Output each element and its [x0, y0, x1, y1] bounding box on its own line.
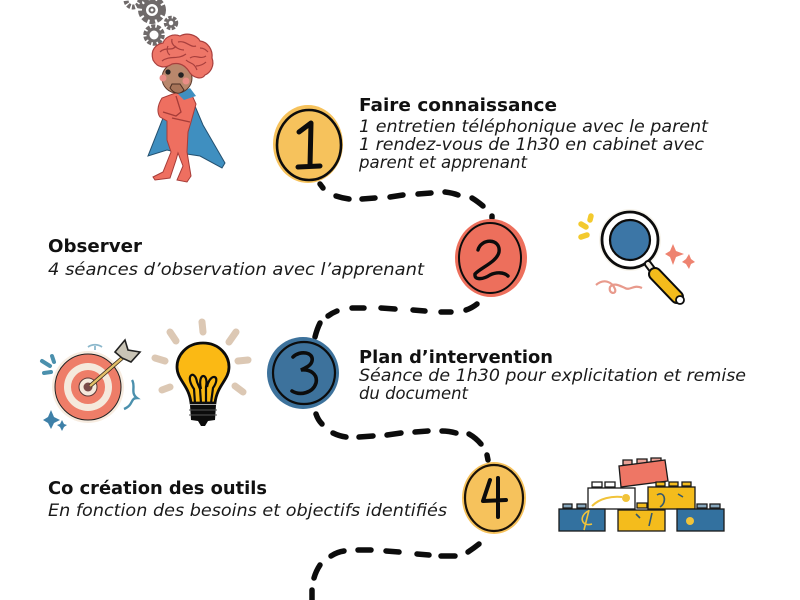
step 4 heading: Co création des outils: [48, 479, 267, 499]
icon: magnifying glass: [581, 209, 695, 304]
icon: light bulb: [155, 322, 248, 426]
filament: [190, 375, 216, 403]
body: [153, 92, 196, 182]
red brick: [623, 458, 661, 465]
step 3 badge: [267, 337, 339, 409]
step 1 description: [358, 117, 709, 172]
arrow: [90, 353, 128, 386]
base: [190, 405, 216, 426]
number 4: [483, 478, 506, 517]
icon: target with arrow: [42, 340, 140, 431]
blue right brick: [697, 504, 720, 508]
blue left brick: [563, 504, 586, 508]
step 2 description: 4 séances d’observation avec l’apprenant: [48, 260, 425, 279]
step 2 badge: [455, 219, 527, 297]
rays: [155, 322, 248, 392]
yellow lower brick: [637, 503, 647, 508]
white brick: [592, 482, 615, 487]
path: dashed route: [312, 184, 492, 600]
yellow upper brick: [656, 482, 691, 486]
step 4 badge: [462, 462, 526, 534]
number 2: [475, 241, 508, 279]
squiggle: [596, 281, 642, 293]
sparkles: [665, 244, 695, 269]
yellow marks: [581, 216, 591, 237]
step 2 heading: Observer: [48, 237, 142, 257]
icon: thinking superhero with brain and gears: [126, 0, 225, 182]
step 4 description: En fonction des besoins et objectifs identifiés: [48, 501, 447, 520]
icon: building blocks: [559, 458, 724, 531]
number 3: [292, 353, 316, 393]
number 1: [298, 123, 320, 167]
face: [162, 63, 192, 93]
step 1 badge: [273, 105, 343, 183]
cape: [148, 106, 225, 168]
icon: gears: [126, 0, 176, 43]
step 1 description: 1 entretien téléphonique avec le parent: [359, 117, 709, 136]
arms: [163, 96, 190, 122]
blue accents: [42, 356, 54, 373]
step 1 description: 1 rendez-vous de 1h30 en cabinet avec: [359, 135, 704, 154]
step 3 heading: Plan d’intervention: [359, 348, 553, 368]
step 1 heading: Faire connaissance: [359, 96, 557, 116]
step 3 description: [359, 366, 746, 403]
step 3 description: du document: [359, 384, 469, 403]
brain hair: [152, 34, 213, 78]
step 3 description: Séance de 1h30 pour explicitation et remise: [359, 366, 746, 385]
brain folds: [160, 39, 208, 70]
step 1 description: parent et apprenant: [358, 153, 528, 172]
collar: [178, 88, 196, 100]
